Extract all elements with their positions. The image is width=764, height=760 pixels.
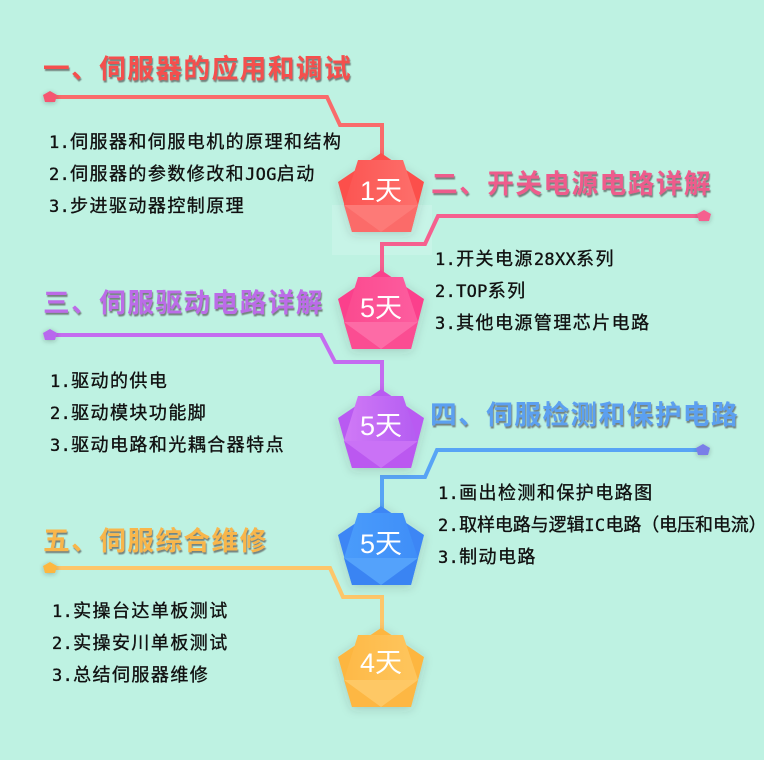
list 3: 2.驱动模块功能脚 bbox=[50, 399, 207, 425]
list 4 bbox=[438, 479, 764, 569]
pale patch behind first badge bbox=[332, 205, 432, 255]
list 5 bbox=[52, 597, 229, 687]
list 4: 3.制动电路 bbox=[438, 543, 537, 569]
list 1: 3.步进驱动器控制原理 bbox=[49, 192, 245, 218]
list 3 bbox=[50, 367, 285, 457]
list 5: 1.实操台达单板测试 bbox=[52, 597, 229, 623]
section 4 connector line bbox=[382, 444, 710, 510]
list 2 bbox=[435, 245, 651, 335]
list 3: 3.驱动电路和光耦合器特点 bbox=[50, 431, 285, 457]
title 4: 四、伺服检测和保护电路 bbox=[430, 400, 739, 430]
list 3: 1.驱动的供电 bbox=[50, 367, 168, 393]
badge: 5 days purple: 5天 bbox=[360, 411, 402, 441]
badge: 5 days blue: 5天 bbox=[360, 529, 402, 559]
title 5: 五、伺服综合维修 bbox=[43, 526, 268, 556]
list 2: 1.开关电源28XX系列 bbox=[435, 245, 615, 271]
badge: 4 days orange bbox=[338, 628, 424, 707]
badge: 1 day bbox=[338, 153, 424, 232]
list 4: 1.画出检测和保护电路图 bbox=[438, 479, 654, 505]
list 5: 2.实操安川单板测试 bbox=[52, 629, 229, 655]
list 2: 3.其他电源管理芯片电路 bbox=[435, 309, 651, 335]
section 2 connector line bbox=[382, 210, 711, 274]
list 2: 2.TOP系列 bbox=[435, 277, 527, 303]
section 5 connector line bbox=[43, 562, 382, 630]
title 1: 一、伺服器的应用和调试 bbox=[43, 54, 352, 84]
badge: 5 days purple bbox=[338, 389, 424, 468]
badge: 4 days orange: 4天 bbox=[360, 648, 402, 678]
title 2: 二、开关电源电路详解 bbox=[431, 169, 712, 199]
badge: 1 day: 1天 bbox=[360, 176, 402, 206]
badge: 5 days pink bbox=[338, 270, 424, 349]
list 5: 3.总结伺服器维修 bbox=[52, 661, 209, 687]
list 1: 2.伺服器的参数修改和JOG启动 bbox=[49, 160, 316, 186]
section 1 connector line bbox=[43, 91, 382, 156]
badge: 5 days blue bbox=[338, 506, 424, 585]
list 4: 2.取样电路与逻辑IC电路（电压和电流） bbox=[438, 511, 764, 537]
title 3: 三、伺服驱动电路详解 bbox=[43, 288, 324, 318]
section 3 connector line bbox=[43, 329, 382, 392]
badge: 5 days pink: 5天 bbox=[360, 293, 402, 323]
list 1: 1.伺服器和伺服电机的原理和结构 bbox=[49, 128, 342, 154]
list 1 bbox=[49, 128, 342, 218]
